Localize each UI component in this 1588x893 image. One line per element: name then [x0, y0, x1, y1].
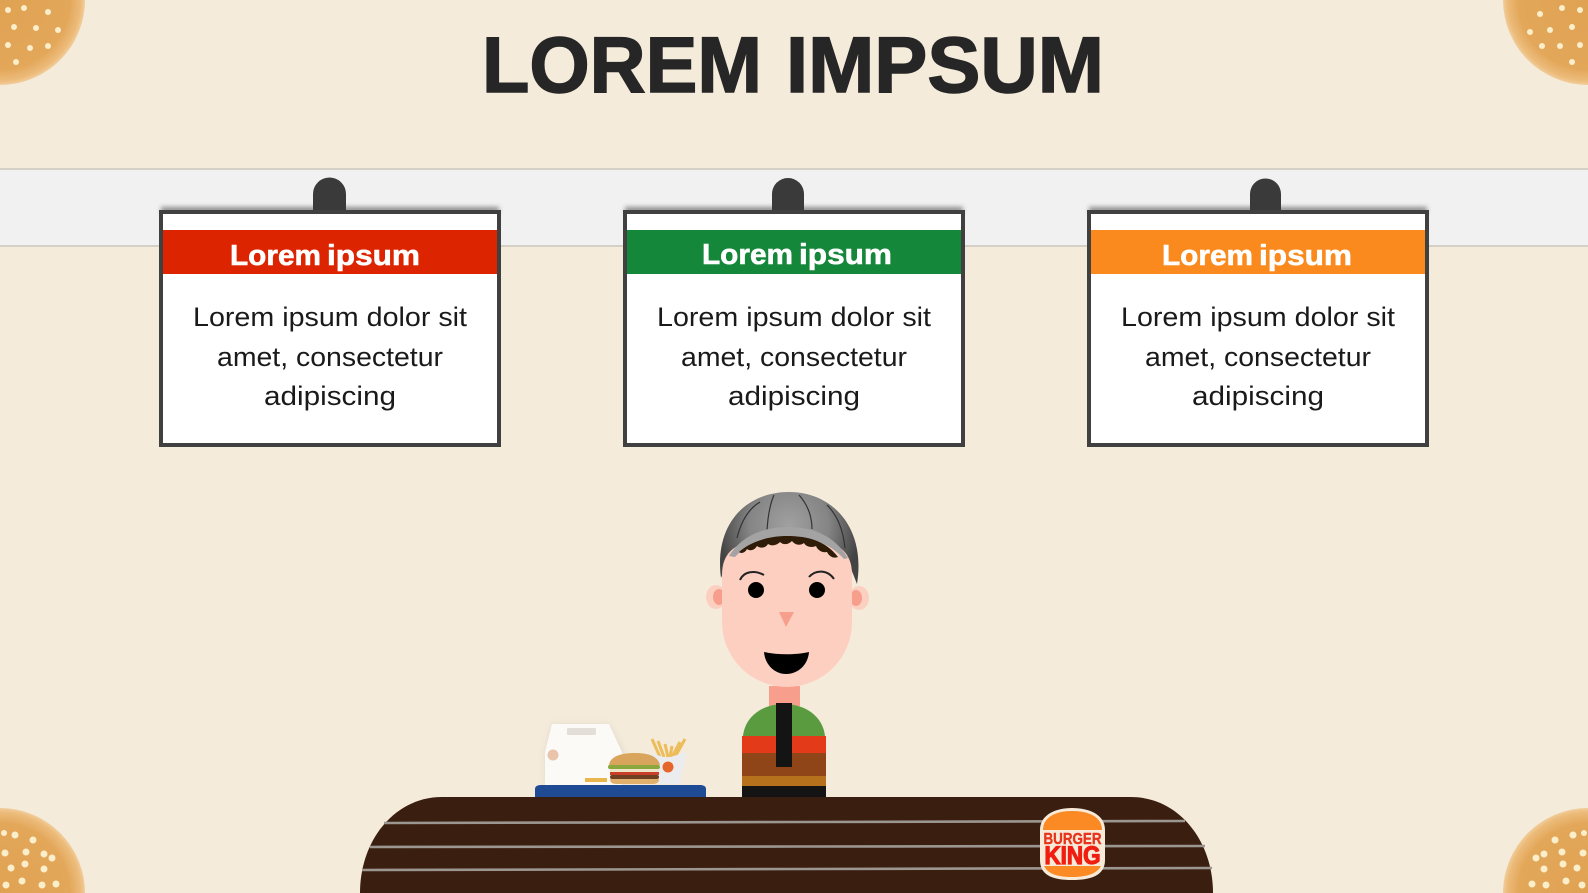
meal on tray	[535, 724, 706, 797]
title: LOREM	[482, 20, 762, 109]
panel: red card: ipsum	[327, 240, 420, 272]
logo: Burger King	[1040, 808, 1105, 880]
counter	[360, 797, 1213, 893]
panel: green card: amet, consectetur	[681, 342, 907, 372]
panel: red card: adipiscing	[264, 381, 396, 411]
fries	[650, 739, 687, 784]
hat band	[729, 527, 848, 559]
panel: orange card: Lorem	[1162, 240, 1253, 272]
left ear	[706, 585, 726, 609]
panel: orange card	[1089, 178, 1427, 445]
takeaway box	[545, 724, 624, 785]
panel: orange card: adipiscing	[1192, 381, 1324, 411]
bun: bottom right	[1503, 808, 1588, 893]
nose	[779, 612, 794, 627]
right eyebrow	[809, 572, 834, 579]
figure: cashier	[706, 492, 869, 797]
tray	[535, 785, 706, 797]
panel: green card: Lorem	[702, 239, 793, 271]
title: IMPSUM	[786, 20, 1104, 109]
panel: orange card: amet, consectetur	[1145, 342, 1371, 372]
panel: red card: amet, consectetur	[217, 342, 443, 372]
hat	[720, 492, 858, 584]
panel: green card: ipsum	[799, 239, 892, 271]
panel: red card: Lorem	[230, 240, 321, 272]
logo: Burger King: KING	[1044, 842, 1100, 870]
panel: orange card: Lorem ipsum dolor sit	[1121, 302, 1396, 332]
title	[482, 20, 1104, 109]
panel: green card	[625, 178, 963, 445]
right ear	[849, 586, 869, 610]
peg	[1250, 178, 1281, 212]
hanging rail	[0, 168, 1588, 247]
left eyebrow	[740, 572, 764, 580]
logo: Burger King: BURGER	[1044, 831, 1102, 848]
panel: red card	[161, 178, 499, 445]
neck	[769, 686, 800, 706]
panel: red card: Lorem ipsum dolor sit	[193, 302, 468, 332]
panel: orange card: ipsum	[1259, 240, 1352, 272]
mouth	[764, 652, 809, 674]
bun: bottom left	[0, 808, 85, 893]
bun: top left	[0, 0, 85, 85]
panel: green card: adipiscing	[728, 381, 860, 411]
bun: top right	[1503, 0, 1588, 85]
left eye	[748, 582, 764, 598]
right eye	[809, 582, 825, 598]
peg	[772, 178, 804, 212]
face	[722, 538, 852, 687]
wrapper scraps	[585, 778, 607, 782]
burger	[608, 753, 660, 784]
uniform	[742, 703, 826, 797]
panel: green card: Lorem ipsum dolor sit	[657, 302, 932, 332]
hair	[739, 536, 838, 558]
peg	[313, 178, 346, 212]
